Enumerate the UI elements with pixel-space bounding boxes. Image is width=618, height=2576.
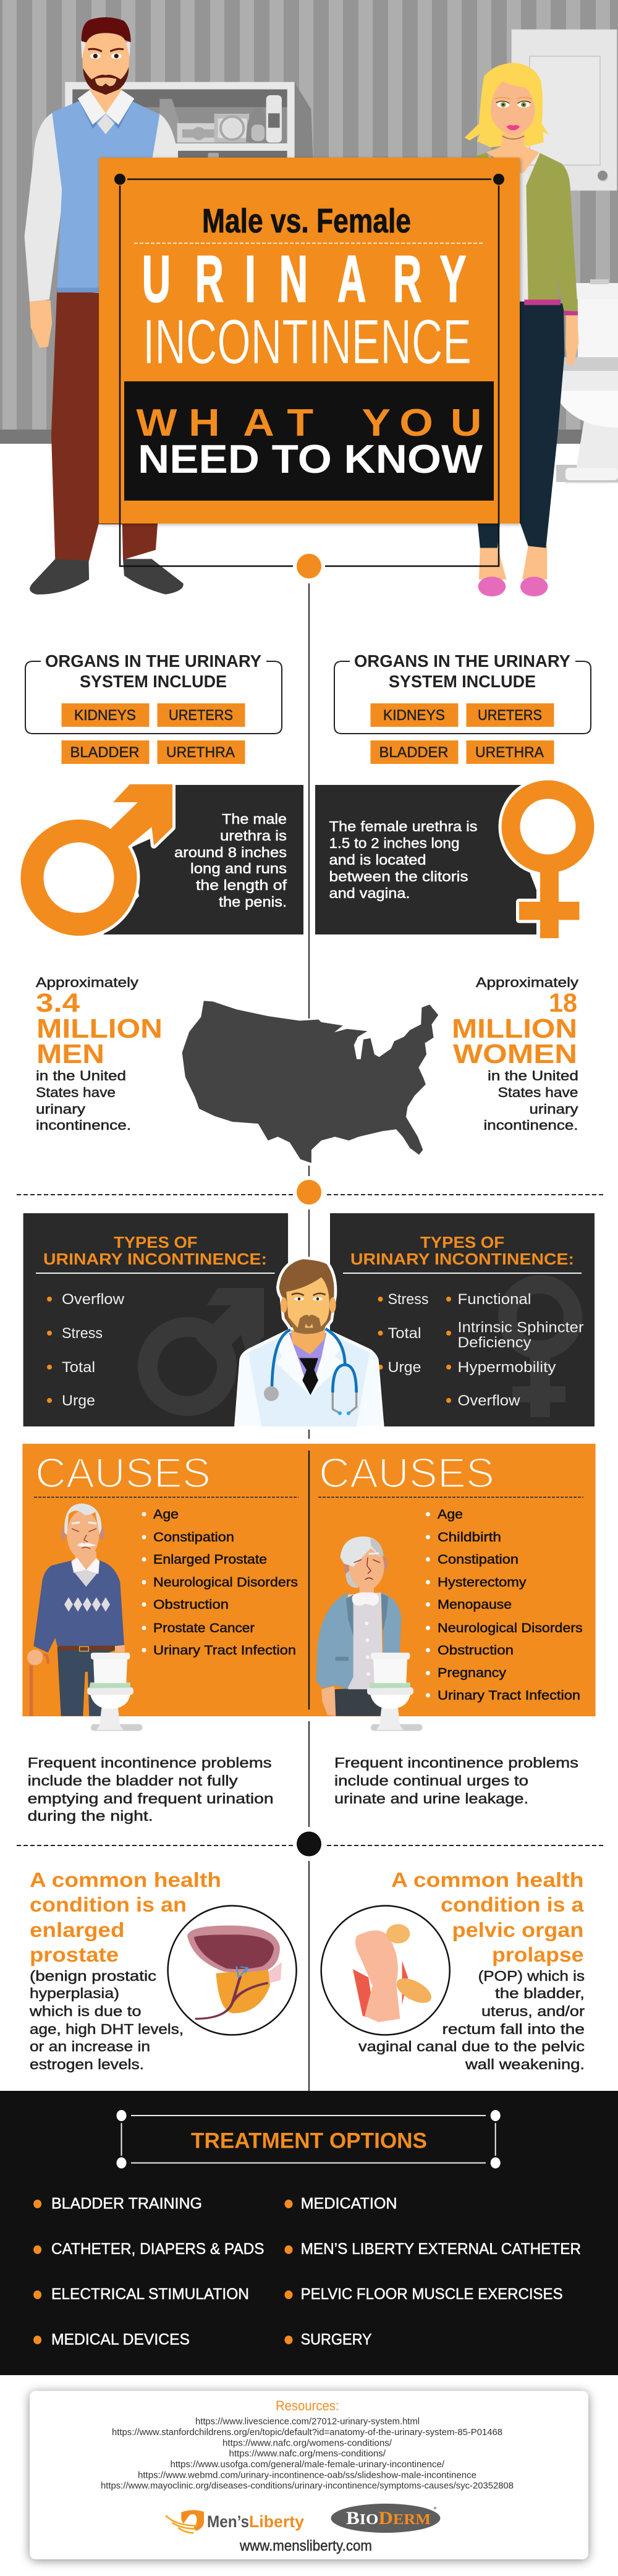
enlarged prostate text: hyperplasia) bbox=[30, 1985, 119, 2001]
enlarged prostate text: prostate bbox=[30, 1943, 119, 1966]
stat: 18 million women: in the United bbox=[488, 1068, 578, 1083]
resources links: https://www.mayoclinic.org/diseases-conditions/urinary-incontinence/symptoms-causes/syc-20352808 bbox=[101, 2481, 514, 2491]
title frame with corner dots bbox=[114, 174, 504, 566]
connector between panels bbox=[308, 1430, 310, 1439]
male urethra text bbox=[174, 811, 287, 910]
frequent problems female text: include continual urges to bbox=[334, 1773, 528, 1789]
frequent problems male text: include the bladder not fully bbox=[28, 1773, 238, 1789]
panel: causes bbox=[22, 1444, 596, 1716]
pelvic organ prolapse text: vaginal canal due to the pelvic bbox=[358, 2038, 585, 2054]
title panel bbox=[99, 158, 520, 566]
female urethra text: between the clitoris bbox=[329, 868, 468, 884]
treatment list: MEDICAL DEVICES bbox=[51, 2331, 190, 2349]
male urethra text: urethra is bbox=[220, 828, 287, 844]
female urethra text: and vagina. bbox=[329, 885, 410, 901]
icon: pelvic organ prolapse diagram bbox=[321, 1906, 450, 2035]
male urethra text: around 8 inches bbox=[174, 844, 287, 860]
stat: 18 million women: WOMEN bbox=[453, 1039, 577, 1069]
list: male types: Overflow bbox=[62, 1291, 125, 1308]
organs box: female: KIDNEYS bbox=[383, 707, 445, 724]
list: female types: Deficiency bbox=[457, 1334, 531, 1351]
male urethra panel bbox=[17, 784, 303, 939]
treatment heading frame: TREATMENT OPTIONS bbox=[191, 2129, 427, 2153]
stat: 18 million women: Approximately bbox=[476, 975, 578, 990]
stat: 18 million women: incontinence. bbox=[483, 1117, 578, 1133]
frequent problems male text: emptying and frequent urination bbox=[28, 1790, 274, 1807]
subtitle black band: WHAT YOU bbox=[136, 402, 481, 444]
stat: 18 million women: States have bbox=[498, 1085, 578, 1100]
list: female types: Hypermobility bbox=[457, 1359, 556, 1376]
enlarged prostate text bbox=[29, 1868, 221, 2072]
female urethra panel bbox=[315, 777, 597, 938]
enlarged prostate text: (benign prostatic bbox=[30, 1968, 156, 1984]
treatment list: ELECTRICAL STIMULATION bbox=[51, 2286, 249, 2303]
stat: 3.4 million men: in the United bbox=[36, 1068, 126, 1083]
list: female causes: Urinary Tract Infection bbox=[438, 1688, 580, 1703]
panel: types male: TYPES OF bbox=[114, 1233, 198, 1252]
organs box: female bbox=[334, 651, 591, 764]
treatment list bbox=[33, 2195, 581, 2349]
list: female types: Total bbox=[388, 1325, 421, 1342]
pelvic organ prolapse text: wall weakening. bbox=[465, 2056, 585, 2072]
divider with black dot bbox=[17, 1832, 603, 2091]
list: male types: Urge bbox=[62, 1392, 95, 1409]
list: male causes: Enlarged Prostate bbox=[153, 1553, 267, 1567]
toilet female bbox=[367, 1653, 422, 1731]
list: female causes: Childbirth bbox=[438, 1530, 501, 1544]
organs box: male bbox=[25, 651, 282, 764]
organs box: female: URETERS bbox=[478, 707, 542, 724]
panel: types female: TYPES OF bbox=[420, 1233, 504, 1252]
treatment list: CATHETER, DIAPERS & PADS bbox=[51, 2240, 265, 2258]
enlarged prostate text: which is due to bbox=[29, 2003, 142, 2019]
organs box: male: SYSTEM INCLUDE bbox=[80, 672, 227, 691]
list: female causes: Hysterectomy bbox=[438, 1575, 527, 1590]
panel: types female bbox=[330, 1213, 595, 1426]
male urethra text: The male bbox=[222, 811, 287, 827]
logo: BioDerm: BIODERM bbox=[346, 2508, 431, 2528]
connector below causes bbox=[308, 1721, 310, 1827]
woman standing bbox=[465, 63, 578, 596]
wall cupboard bbox=[512, 30, 617, 190]
treatment list: SURGERY bbox=[301, 2331, 372, 2349]
list: female types: Urge bbox=[388, 1359, 421, 1376]
list: female causes: Menopause bbox=[438, 1598, 512, 1612]
frequent problems female text bbox=[334, 1755, 578, 1807]
treatment heading frame bbox=[116, 2110, 501, 2169]
causes heading female: CAUSES bbox=[319, 1450, 494, 1497]
organs box: male: ORGANS IN THE URINARY bbox=[45, 651, 261, 671]
organs box: male: KIDNEYS bbox=[74, 707, 136, 724]
treatment options band bbox=[0, 2091, 618, 2375]
list: male causes: Urinary Tract Infection bbox=[153, 1643, 296, 1658]
female urethra text: and is located bbox=[329, 852, 426, 868]
list: female causes: Obstruction bbox=[438, 1643, 514, 1658]
organs box: female: BLADDER bbox=[379, 744, 449, 761]
list: male causes: Obstruction bbox=[153, 1598, 229, 1612]
organs box: female: SYSTEM INCLUDE bbox=[389, 672, 536, 691]
stat: 18 million women bbox=[452, 975, 578, 1133]
panel: types male: URINARY INCONTINENCE: bbox=[43, 1250, 267, 1268]
shelf cabinet bbox=[65, 82, 313, 164]
male urethra text: the penis. bbox=[219, 894, 287, 910]
enlarged prostate text: estrogen levels. bbox=[30, 2056, 144, 2072]
frequent problems male text bbox=[28, 1755, 274, 1824]
US map bbox=[182, 1001, 438, 1163]
organs box: male: BLADDER bbox=[70, 744, 140, 761]
resources links: https://www.usofga.com/general/male-female-urinary-incontinence/ bbox=[171, 2460, 445, 2470]
pelvic organ prolapse text: rectum fall into the bbox=[442, 2021, 585, 2037]
logo: BioDerm bbox=[331, 2504, 440, 2533]
list: female types: Functional bbox=[457, 1291, 531, 1308]
icon: female watermark bbox=[507, 1284, 573, 1417]
frequent problems female text: Frequent incontinence problems bbox=[334, 1755, 578, 1771]
stat: 18 million women: urinary bbox=[529, 1101, 578, 1117]
female urethra text: The female urethra is bbox=[329, 818, 477, 834]
subtitle black band bbox=[124, 381, 494, 501]
list: male causes: Neurological Disorders bbox=[153, 1575, 298, 1590]
pelvic organ prolapse text: condition is a bbox=[441, 1893, 584, 1916]
icon: male symbol bbox=[17, 784, 172, 939]
list: male causes bbox=[142, 1507, 298, 1658]
pelvic organ prolapse text: pelvic organ bbox=[452, 1918, 583, 1941]
resources heading: Resources: bbox=[276, 2398, 339, 2413]
enlarged prostate text: or an increase in bbox=[30, 2038, 150, 2054]
organs box: female: URETHRA bbox=[475, 744, 544, 761]
list: female causes: Constipation bbox=[438, 1553, 519, 1567]
list: male causes: Constipation bbox=[153, 1530, 234, 1544]
list: female types: Intrinsic Sphincter bbox=[457, 1319, 584, 1336]
pelvic organ prolapse text: uterus, and/or bbox=[481, 2003, 585, 2019]
panel: types male bbox=[23, 1213, 288, 1426]
logo: Men's Liberty bbox=[166, 2510, 304, 2533]
old man illustration bbox=[27, 1504, 142, 1731]
organs box: female: ORGANS IN THE URINARY bbox=[354, 651, 570, 671]
pelvic organ prolapse text: the bladder, bbox=[495, 1985, 585, 2001]
hero background: bathroom wall bbox=[0, 0, 618, 483]
list: female types bbox=[378, 1291, 584, 1409]
stat: 3.4 million men: MILLION bbox=[36, 1014, 163, 1044]
resources links: https://www.nafc.org/mens-conditions/ bbox=[229, 2449, 386, 2459]
panel: types female: URINARY INCONTINENCE: bbox=[350, 1250, 574, 1268]
stat: 3.4 million men: Approximately bbox=[36, 975, 138, 990]
doctor illustration bbox=[235, 1258, 384, 1426]
list: female causes bbox=[426, 1507, 583, 1703]
list: female causes: Neurological Disorders bbox=[438, 1621, 583, 1635]
title line: Incontinence: INCONTINENCE bbox=[143, 307, 472, 377]
title line: Urinary: URINARY bbox=[142, 242, 466, 316]
website address: www.mensliberty.com bbox=[239, 2538, 372, 2554]
enlarged prostate text: A common health bbox=[30, 1868, 221, 1891]
logo: Men's Liberty: Liberty bbox=[249, 2512, 304, 2531]
enlarged prostate text: condition is an bbox=[30, 1893, 187, 1916]
male urethra text: long and runs bbox=[190, 860, 287, 876]
list: female causes: Pregnancy bbox=[438, 1666, 507, 1680]
stat: 3.4 million men bbox=[36, 975, 163, 1133]
icon: female symbol bbox=[498, 777, 597, 938]
male urethra text: the length of bbox=[196, 877, 287, 893]
frequent problems male text: Frequent incontinence problems bbox=[28, 1755, 272, 1771]
list: female causes: Age bbox=[438, 1507, 463, 1522]
stat: 3.4 million men: urinary bbox=[36, 1101, 85, 1117]
list: male causes: Prostate Cancer bbox=[153, 1621, 255, 1635]
stat: 3.4 million men: MEN bbox=[36, 1039, 104, 1069]
resources links: https://www.nafc.org/womens-conditions/ bbox=[222, 2438, 392, 2448]
pelvic organ prolapse text: A common health bbox=[391, 1868, 583, 1891]
resources links: https://www.stanfordchildrens.org/en/topic/default?id=anatomy-of-the-urinary-system-85-P01468 bbox=[112, 2428, 502, 2438]
frequent problems male text: during the night. bbox=[28, 1808, 153, 1824]
frequent problems female text: urinate and urine leakage. bbox=[334, 1790, 528, 1807]
treatment list: MEDICATION bbox=[301, 2195, 397, 2213]
treatment list: PELVIC FLOOR MUSCLE EXERCISES bbox=[301, 2286, 563, 2303]
causes heading male: CAUSES bbox=[35, 1450, 211, 1497]
divider with orange dot bbox=[17, 1166, 603, 1258]
logo: Men's Liberty: Men’s bbox=[207, 2512, 249, 2531]
list: female types: Stress bbox=[388, 1291, 429, 1308]
stat: 3.4 million men: States have bbox=[36, 1085, 116, 1100]
toilet male bbox=[87, 1653, 142, 1731]
list: female types: Overflow bbox=[457, 1392, 520, 1409]
title line: Male vs. Female: Male vs. Female bbox=[202, 201, 411, 240]
list: male types bbox=[47, 1291, 125, 1409]
enlarged prostate text: enlarged bbox=[30, 1918, 124, 1941]
stat: 18 million women: MILLION bbox=[452, 1014, 577, 1044]
pelvic organ prolapse text: (POP) which is bbox=[478, 1968, 585, 1984]
list: male types: Stress bbox=[62, 1325, 103, 1342]
female urethra text bbox=[329, 818, 477, 901]
pelvic organ prolapse text: prolapse bbox=[492, 1943, 583, 1966]
center connector top bbox=[297, 554, 321, 1019]
resources links bbox=[101, 2417, 514, 2491]
man standing bbox=[25, 17, 184, 595]
stat: 3.4 million men: 3.4 bbox=[36, 988, 80, 1018]
resources links: https://www.livescience.com/27012-urinary-system.html bbox=[195, 2417, 420, 2427]
icon: enlarged prostate diagram bbox=[168, 1906, 297, 2035]
stat: 3.4 million men: incontinence. bbox=[36, 1117, 131, 1133]
treatment list: BLADDER TRAINING bbox=[51, 2195, 202, 2213]
list: male types: Total bbox=[62, 1359, 95, 1376]
stat: 18 million women: 18 bbox=[549, 988, 577, 1018]
background toilet bbox=[555, 279, 618, 483]
enlarged prostate text: age, high DHT levels, bbox=[30, 2021, 184, 2037]
organs box: male: URETHRA bbox=[166, 744, 235, 761]
resources card bbox=[30, 2391, 588, 2559]
treatment list: MEN’S LIBERTY EXTERNAL CATHETER bbox=[301, 2240, 581, 2258]
resources links: https://www.webmd.com/urinary-incontinence-oab/ss/slideshow-male-incontinence bbox=[138, 2471, 476, 2481]
list: male causes: Age bbox=[153, 1507, 179, 1522]
pelvic organ prolapse text bbox=[358, 1868, 585, 2072]
old woman illustration bbox=[316, 1536, 422, 1731]
organs box: male: URETERS bbox=[169, 707, 233, 724]
icon: male watermark bbox=[148, 1288, 264, 1406]
female urethra text: 1.5 to 2 inches long bbox=[329, 835, 460, 851]
subtitle black band: NEED TO KNOW bbox=[138, 436, 483, 481]
